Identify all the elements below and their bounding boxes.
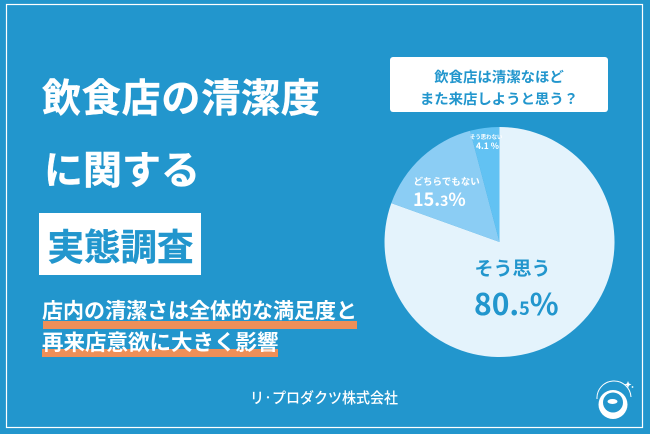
question panel: 飲食店は清潔なほど (434, 66, 564, 87)
title: line 1: 飲食店の清潔度 (42, 68, 321, 124)
subtitle line 1 with underline: 店内の清潔さは全体的な満足度と (42, 295, 357, 325)
icon: mascot logo (597, 381, 633, 419)
question panel (390, 57, 608, 112)
label: そう思う: そう思う (474, 254, 551, 281)
label: そう思わない: そう思わない (470, 133, 503, 141)
company name: リ·プロダクツ株式会社 (250, 387, 398, 408)
slice: そう思う 80.5% (385, 127, 615, 357)
pie chart (385, 127, 615, 357)
value: 4.1%: 4.1 % (476, 140, 499, 152)
slice: そう思わない 4.1% (470, 127, 500, 242)
title: line 2: に関する (44, 140, 200, 196)
title badge: 実態調査: 実態調査 (48, 218, 194, 271)
subtitle line 2 with underline: 再来店意欲に大きく影響 (42, 326, 279, 357)
value: 80.5%: 80.5% (474, 280, 559, 324)
question panel: また来店しようと思う？ (420, 88, 578, 109)
slice: どちらでもない 15.3% (391, 131, 500, 242)
label: どちらでもない: どちらでもない (414, 174, 480, 188)
value: 15.3%: 15.3% (413, 186, 466, 212)
